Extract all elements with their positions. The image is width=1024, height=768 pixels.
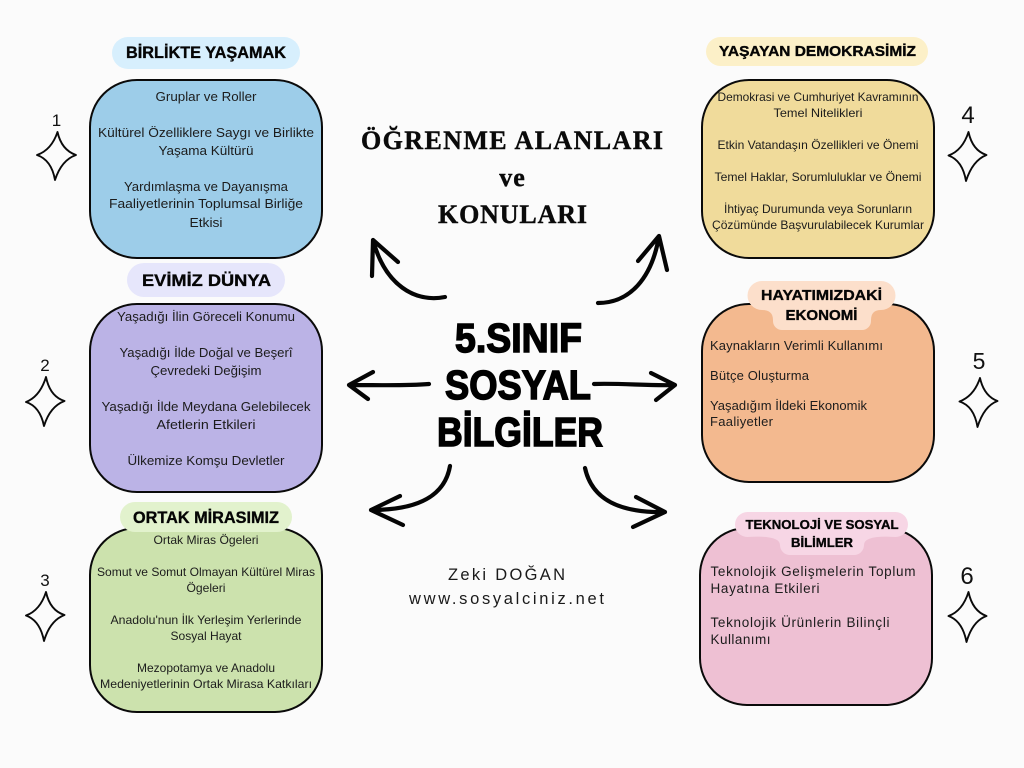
panel 3: Ortak Mirasımız [90, 528, 322, 712]
number 1 with star: 1 [52, 111, 61, 130]
panel 3: Ortak Mirasımız: Medeniyetlerinin Ortak Mirasa Katkıları [100, 677, 312, 691]
panel 3: Ortak Mirasımız: Ögeleri [186, 581, 226, 595]
central title: 5. Sınıf Sosyal Bilgiler [437, 315, 603, 455]
panel 4: Yaşayan Demokrasimiz: Temel Nitelikleri [774, 106, 862, 120]
panel 2: Evimiz Dünya: Yaşadığı İlin Göreceli Konumu [117, 309, 295, 324]
panel 3: Ortak Mirasımız: Ortak Miras Ögeleri [154, 533, 258, 547]
title: Öğrenme Alanları ve Konuları [361, 126, 663, 229]
panel 6: Teknoloji ve Sosyal Bilimler: Teknolojik Gelişmelerin Toplum [710, 564, 916, 579]
panel 3: Ortak Mirasımız: Sosyal Hayat [170, 629, 242, 643]
heading pill: Teknoloji ve Sosyal Bilimler: BİLİMLER [791, 535, 854, 550]
number 3 with star [26, 571, 64, 641]
panel 4: Yaşayan Demokrasimiz: Demokrasi ve Cumhuriyet Kavramının [718, 90, 918, 104]
panel 2: Evimiz Dünya: Yaşadığı İlde Meydana Gelebilecek [102, 399, 311, 414]
panel 5: Hayatımızdaki Ekonomi: Bütçe Oluşturma [710, 368, 810, 383]
central title: 5. Sınıf Sosyal Bilgiler: SOSYAL [445, 362, 591, 408]
arrow: to Evimiz Dünya [349, 372, 429, 399]
heading pill: Ortak Mirasımız [120, 502, 292, 532]
panel 5: Hayatımızdaki Ekonomi: Faaliyetler [710, 414, 774, 429]
heading pill: Teknoloji ve Sosyal Bilimler [735, 512, 908, 555]
panel 3: Ortak Mirasımız: Somut ve Somut Olmayan Kültürel Miras [97, 565, 315, 579]
heading pill: Ortak Mirasımız: ORTAK MİRASIMIZ [133, 509, 279, 527]
panel 1: Birlikte Yaşamak: Etkisi [190, 215, 223, 230]
panel 4: Yaşayan Demokrasimiz: Temel Haklar, Sorumluluklar ve Önemi [714, 170, 922, 184]
heading pill: Yaşayan Demokrasimiz [706, 37, 928, 66]
panel 2: Evimiz Dünya: Çevredeki Değişim [150, 363, 262, 378]
number 4 with star [948, 102, 986, 181]
panel 5: Hayatımızdaki Ekonomi: Kaynakların Verimli Kullanımı [710, 338, 883, 353]
heading pill: Hayatımızdaki Ekonomi [748, 281, 896, 330]
number 2 with star [26, 356, 64, 426]
heading pill: Birlikte Yaşamak: BİRLİKTE YAŞAMAK [126, 44, 286, 62]
heading pill: Evimiz Dünya [127, 263, 285, 297]
heading pill: Hayatımızdaki Ekonomi: HAYATIMIZDAKİ [761, 287, 882, 304]
panel 4: Yaşayan Demokrasimiz: Etkin Vatandaşın Özellikleri ve Önemi [718, 138, 918, 152]
panel 6: Teknoloji ve Sosyal Bilimler [700, 528, 932, 705]
number 6 with star [948, 563, 986, 642]
central title: 5. Sınıf Sosyal Bilgiler: 5.SINIF [455, 315, 582, 361]
number 5 with star: 5 [973, 348, 985, 374]
panel 1: Birlikte Yaşamak: Kültürel Özelliklere Saygı ve Birlikte [98, 125, 314, 140]
number 4 with star: 4 [961, 102, 975, 129]
panel 4: Yaşayan Demokrasimiz: İhtiyaç Durumunda veya Sorunların [724, 202, 912, 216]
title: Öğrenme Alanları ve Konuları: ÖĞRENME ALANLARI [361, 126, 663, 155]
panel 6: Teknoloji ve Sosyal Bilimler: Kullanımı [710, 632, 770, 647]
panel 6: Teknoloji ve Sosyal Bilimler: Teknolojik Ürünlerin Bilinçli [710, 615, 890, 630]
arrow: to Birlikte Yaşamak [372, 240, 445, 298]
author credit [408, 565, 604, 608]
panel 6: Teknoloji ve Sosyal Bilimler: Hayatına Etkileri [710, 581, 820, 596]
central title: 5. Sınıf Sosyal Bilgiler: BİLGİLER [437, 409, 603, 455]
arrow: to Teknoloji ve Sosyal Bilimler [585, 468, 665, 527]
panel 4: Yaşayan Demokrasimiz [702, 80, 934, 258]
arrow: to Yaşayan Demokrasimiz [598, 236, 667, 303]
heading pill: Yaşayan Demokrasimiz: YAŞAYAN DEMOKRASİMİZ [719, 43, 916, 60]
heading pill: Teknoloji ve Sosyal Bilimler: TEKNOLOJİ VE SOSYAL [746, 517, 899, 532]
author credit: Zeki DOĞAN [448, 565, 565, 584]
panel 1: Birlikte Yaşamak: Yaşama Kültürü [158, 143, 254, 158]
number 3 with star: 3 [40, 571, 50, 590]
title: Öğrenme Alanları ve Konuları: KONULARI [438, 200, 587, 229]
panel 4: Yaşayan Demokrasimiz: Çözümünde Başvurulabilecek Kurumlar [712, 218, 924, 232]
heading pill: Evimiz Dünya: EVİMİZ DÜNYA [142, 271, 271, 290]
panel 2: Evimiz Dünya [90, 304, 322, 492]
panel 2: Evimiz Dünya: Yaşadığı İlde Doğal ve Beşerî [120, 345, 293, 360]
panel 2: Evimiz Dünya: Afetlerin Etkileri [156, 417, 256, 432]
panel 2: Evimiz Dünya: Ülkemize Komşu Devletler [128, 453, 285, 468]
panel 3: Ortak Mirasımız: Anadolu'nun İlk Yerleşim Yerlerinde [110, 613, 302, 627]
arrow: to Hayatımızdaki Ekonomi [594, 373, 675, 400]
panel 3: Ortak Mirasımız: Mezopotamya ve Anadolu [137, 661, 275, 675]
heading pill: Hayatımızdaki Ekonomi: EKONOMİ [786, 307, 858, 324]
panel 5: Hayatımızdaki Ekonomi [702, 304, 934, 482]
author credit: www.sosyalciniz.net [408, 590, 604, 608]
heading pill: Birlikte Yaşamak [112, 37, 300, 69]
title: Öğrenme Alanları ve Konuları: ve [499, 163, 526, 192]
panel 1: Birlikte Yaşamak: Gruplar ve Roller [156, 89, 257, 104]
panel 1: Birlikte Yaşamak: Yardımlaşma ve Dayanışma [124, 179, 289, 194]
arrow: to Ortak Mirasımız [371, 466, 450, 525]
number 6 with star: 6 [960, 563, 974, 590]
number 1 with star [37, 111, 76, 180]
number 5 with star [960, 348, 998, 427]
number 2 with star: 2 [40, 356, 50, 375]
panel 1: Birlikte Yaşamak: Faaliyetlerinin Toplumsal Birliğe [109, 196, 303, 211]
panel 1: Birlikte Yaşamak [90, 80, 322, 258]
panel 5: Hayatımızdaki Ekonomi: Yaşadığım İldeki Ekonomik [710, 398, 868, 413]
